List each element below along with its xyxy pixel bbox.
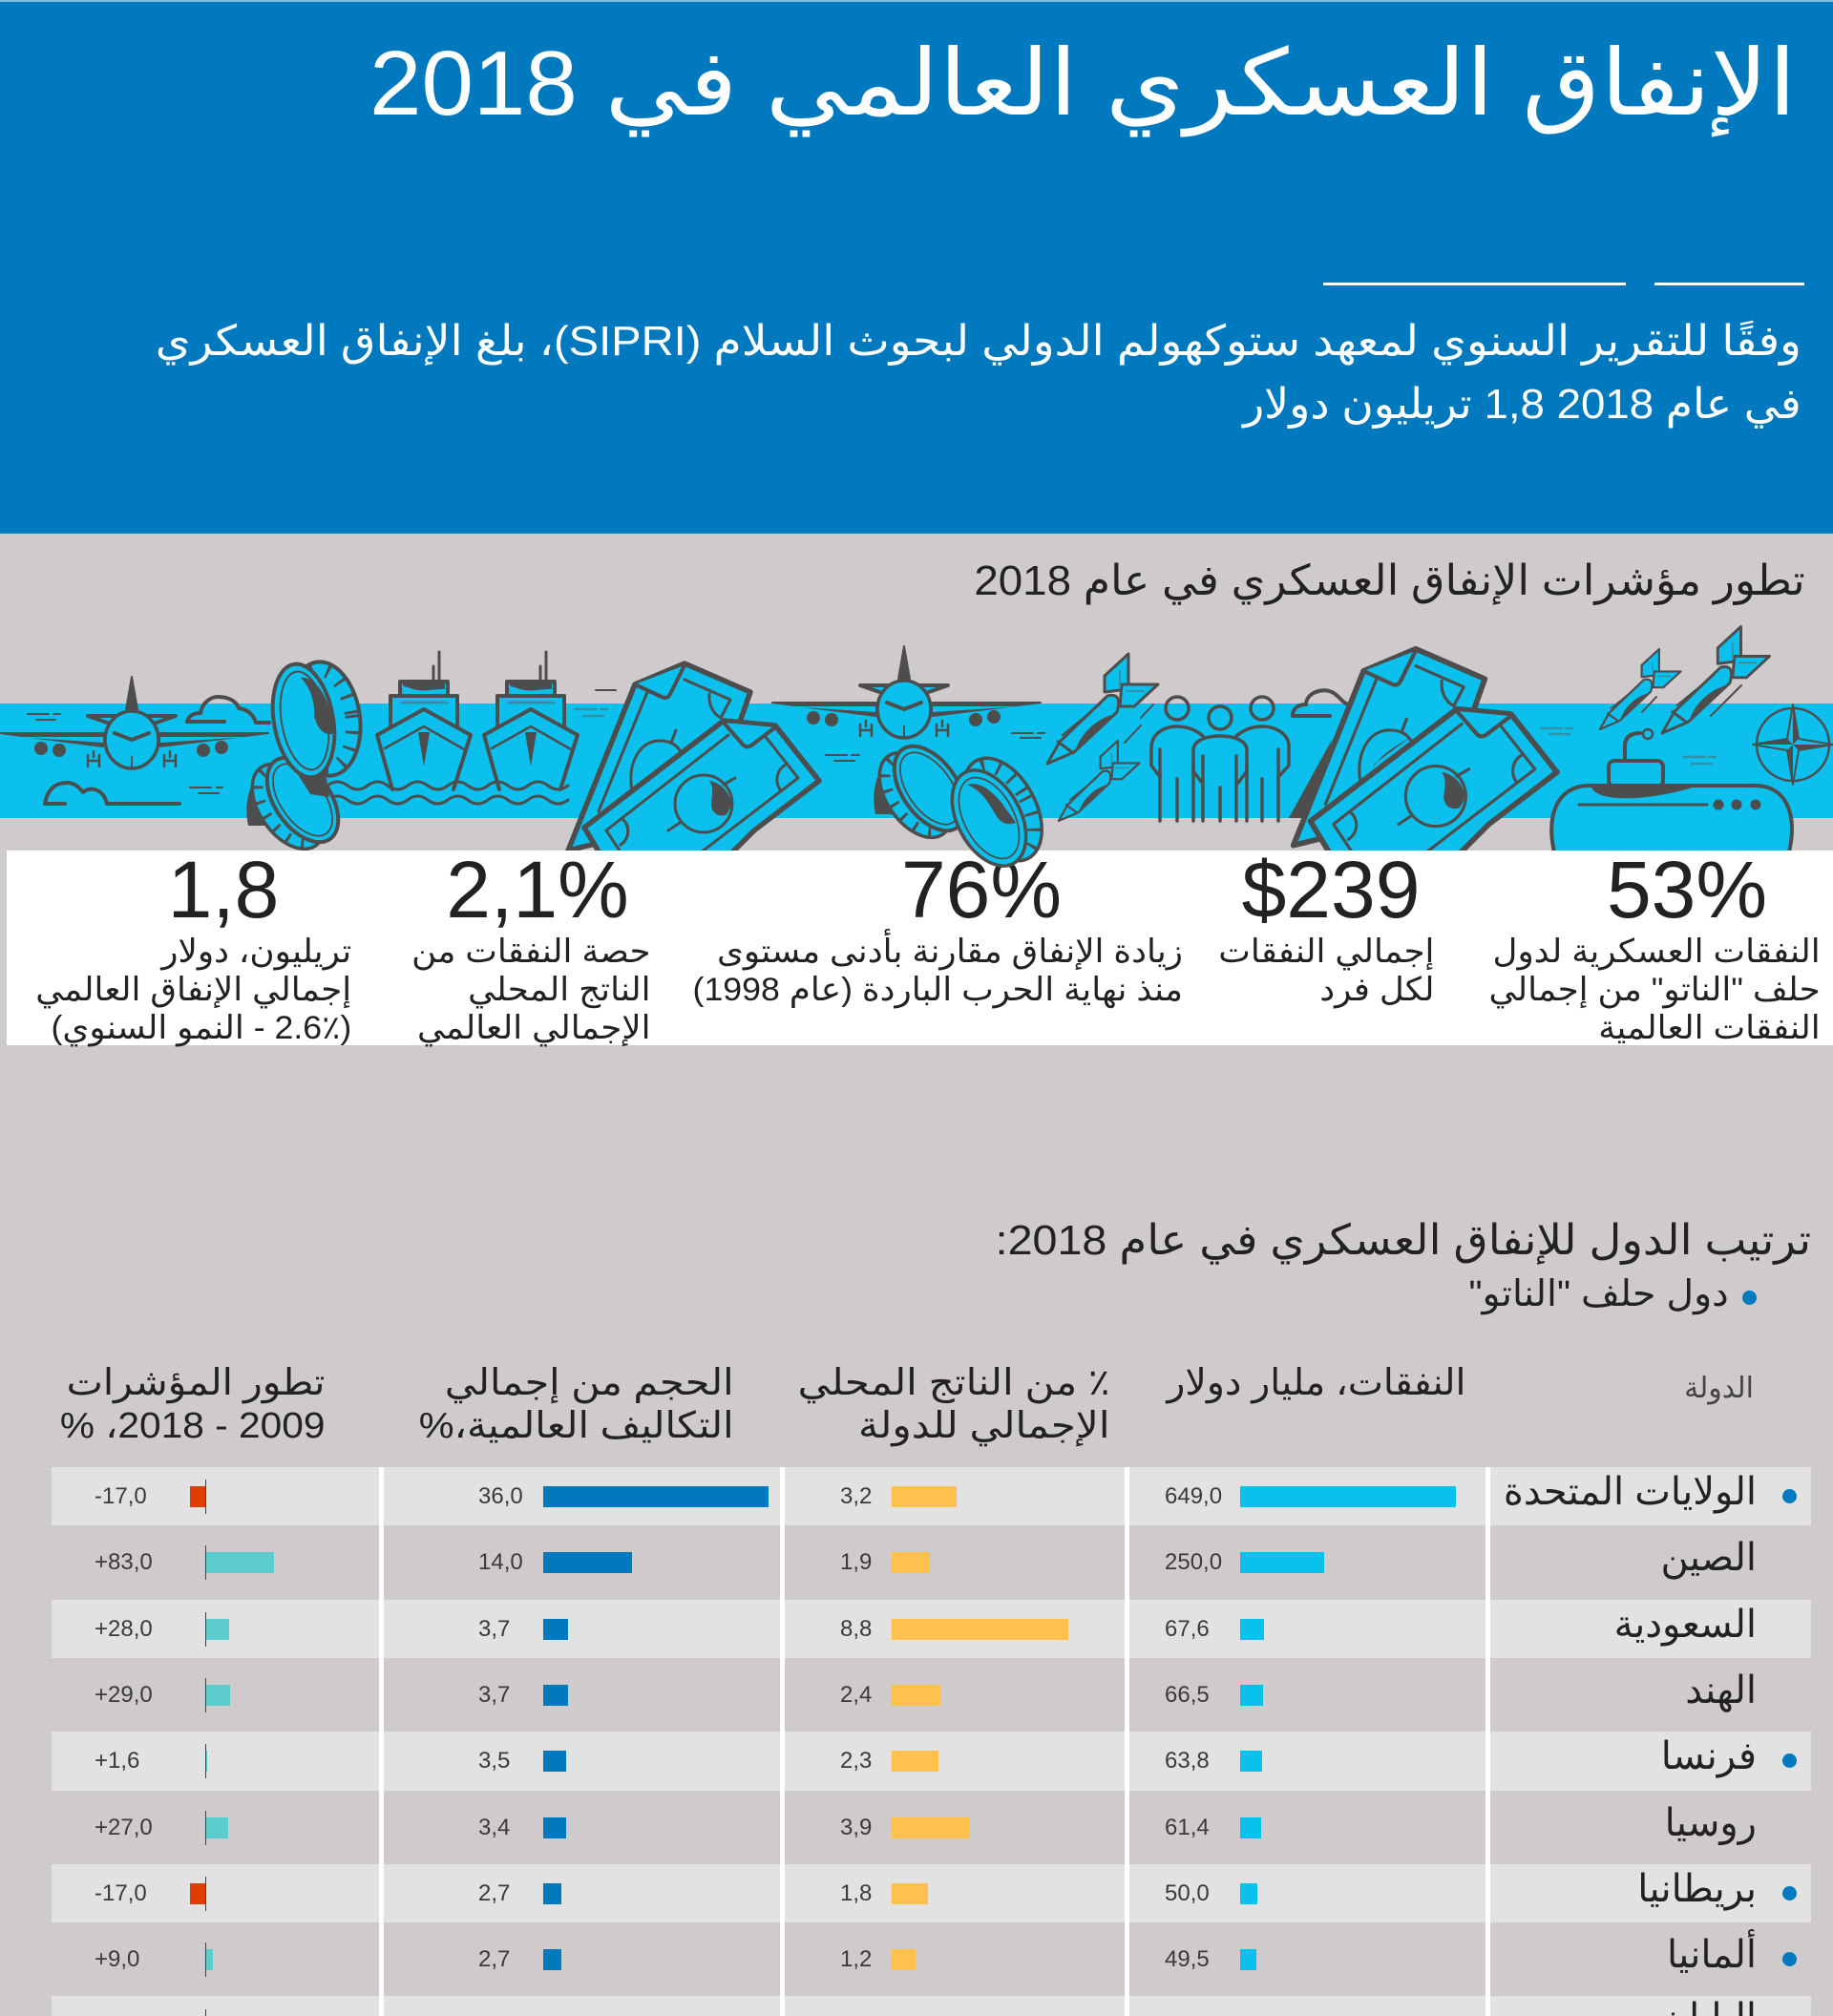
stat: share of world GDP: حصة النفقات من [412, 934, 651, 970]
column header: share of world spending: الحجم من إجمالي [445, 1363, 734, 1403]
row: India: +29,0 [95, 1682, 153, 1707]
stat: increase since 1998 [693, 845, 1183, 1008]
row: China: 250,0 [1165, 1549, 1222, 1575]
stat: spending per person [1218, 845, 1434, 1008]
row: Saudi Arabia [52, 1600, 1811, 1658]
panel: key figures [7, 850, 1833, 1045]
stat: total spending: إجمالي الإنفاق العالمي [35, 972, 351, 1008]
stat: total spending: 1,8 [168, 845, 279, 934]
row: Russia: 61,4 [1165, 1814, 1210, 1840]
stat: NATO share: حلف "الناتو" من إجمالي [1489, 972, 1821, 1008]
stat: total spending: (2.6٪ - النمو السنوي) [51, 1010, 351, 1046]
icon: banknotes right [1289, 645, 1560, 850]
header panel [0, 0, 1833, 534]
icon: airplane centre [772, 646, 1041, 738]
band [0, 704, 1833, 818]
row: China [95, 1537, 1757, 1580]
row: Saudi Arabia: 8,8 [840, 1615, 872, 1642]
icon: missile small centre [1059, 741, 1139, 821]
row: France: 63,8 [1165, 1748, 1210, 1774]
column header: country: الدولة [1684, 1373, 1754, 1404]
row: UK: 50,0 [1165, 1880, 1210, 1905]
row: Russia: 3,9 [840, 1814, 872, 1840]
icon: coin centre right [938, 745, 1058, 878]
icon: clouds and speed lines [28, 690, 1716, 804]
row: UK: 2,7 [478, 1880, 510, 1905]
icon: ship left [377, 652, 471, 789]
column header: percent of GDP: ٪ من الناتج المحلي [798, 1363, 1110, 1403]
row: UK [52, 1864, 1811, 1922]
row: India: الهند [1685, 1669, 1757, 1711]
icon: speed lines centre [1125, 704, 1153, 743]
row: India [95, 1669, 1757, 1712]
row: Germany: 1,2 [840, 1945, 872, 1972]
column header: percent of GDP [798, 1363, 1110, 1447]
column header: share of world spending [419, 1363, 734, 1446]
stat: share of world GDP: الإجمالي العالمي [417, 1010, 651, 1046]
row: Germany: 49,5 [1165, 1945, 1210, 1972]
row: China: +83,0 [95, 1549, 153, 1575]
stat: spending per person: إجمالي النفقات [1218, 934, 1434, 970]
legend dot [1742, 1291, 1757, 1305]
row: Saudi Arabia: +28,0 [95, 1615, 153, 1642]
column header: trend: تطور المؤشرات [66, 1363, 325, 1403]
stat: total spending [35, 845, 351, 1046]
column header: spending: النفقات، مليار دولار [1167, 1363, 1465, 1403]
heading: ranking: ترتيب الدول للإنفاق العسكري في عام 2018: [996, 1217, 1811, 1264]
row: USA: -17,0 [95, 1483, 147, 1508]
row: Germany [95, 1929, 1797, 1977]
row: India: 66,5 [1165, 1682, 1210, 1707]
stat: increase since 1998: 76% [901, 845, 1062, 934]
stat: share of world GDP: الناتج المحلي [469, 972, 651, 1008]
row: Russia [95, 1802, 1757, 1845]
stat: NATO share: النفقات العسكرية لدول [1493, 934, 1821, 970]
row: USA: 36,0 [478, 1483, 523, 1508]
stat: NATO share: النفقات العالمية [1599, 1010, 1821, 1046]
intro text: وفقًا للتقرير السنوي لمعهد ستوكهولم الدولي لبحوث السلام (SIPRI)، بلغ الإنفاق العسكري [156, 318, 1801, 365]
row: Russia: 3,4 [478, 1814, 510, 1840]
row: USA: 649,0 [1165, 1483, 1222, 1508]
icon: ship right [484, 652, 578, 789]
stat: increase since 1998: زيادة الإنفاق مقارنة بأدنى مستوى [717, 934, 1183, 970]
column header: share of world spending: التكاليف العالمية،% [419, 1406, 734, 1446]
illustration strip [0, 624, 1833, 868]
row: UK: -17,0 [95, 1880, 147, 1905]
row: Germany: ألمانيا [1667, 1934, 1757, 1976]
title: 2018 [369, 32, 578, 135]
row: UK: بريطانيا [1637, 1867, 1757, 1909]
row: France [52, 1732, 1811, 1791]
icon: submarine [1551, 729, 1792, 859]
title: الإنفاق العسكري العالمي في [605, 32, 1797, 135]
stat: NATO share: 53% [1607, 845, 1767, 934]
intro text [156, 318, 1801, 429]
stat: increase since 1998: منذ نهاية الحرب الباردة (عام 1998) [693, 972, 1183, 1008]
row: France: 3,5 [478, 1748, 510, 1774]
icon: missile large right [1662, 626, 1770, 733]
row: USA [52, 1467, 1811, 1525]
icon: missile large centre [1047, 654, 1158, 764]
row: China: 1,9 [840, 1549, 872, 1575]
row: Russia: روسيا [1665, 1802, 1757, 1844]
icon: NATO compass [1753, 704, 1833, 785]
row: Germany: 2,7 [478, 1945, 510, 1972]
stat: share of world GDP [412, 845, 651, 1046]
stat: spending per person: $239 [1242, 845, 1420, 934]
row: France: فرنسا [1661, 1735, 1757, 1777]
stat: NATO share [1489, 845, 1821, 1046]
icon: missile small right [1600, 649, 1680, 729]
row: Germany: +9,0 [95, 1945, 139, 1972]
icon: coin upper [264, 657, 368, 797]
row: India: 2,4 [840, 1682, 872, 1707]
stat: share of world GDP: 2,1% [446, 845, 629, 934]
row: France: +1,6 [95, 1748, 139, 1774]
column header: percent of GDP: الإجمالي للدولة [858, 1406, 1110, 1446]
row: France: 2,3 [840, 1748, 872, 1774]
row: Japan [52, 1996, 1811, 2016]
column header: trend: 2009 - 2018، % [59, 1406, 325, 1446]
legend: NATO members [1469, 1274, 1757, 1315]
row: Saudi Arabia: السعودية [1614, 1604, 1757, 1646]
row: China: 14,0 [478, 1549, 523, 1575]
icon: waves [327, 782, 568, 804]
row: Saudi Arabia: 3,7 [478, 1615, 510, 1642]
icon: banknotes left [565, 661, 822, 850]
icon: coin centre left [865, 733, 980, 850]
icon: airplane left [0, 677, 268, 768]
row: India: 3,7 [478, 1682, 510, 1707]
row: USA: 3,2 [840, 1483, 872, 1508]
icon: people [1151, 697, 1289, 821]
row: China: الصين [1660, 1537, 1757, 1579]
divider lines [1323, 283, 1804, 285]
intro text: في عام 2018 1,8 تريليون دولار [1243, 381, 1801, 428]
icon: coin lower [238, 745, 352, 862]
column header: trend [59, 1363, 325, 1446]
stat: total spending: تريليون، دولار [161, 934, 351, 970]
legend label: دول حلف "الناتو" [1469, 1274, 1729, 1314]
row: Saudi Arabia: 67,6 [1165, 1615, 1210, 1642]
heading: indicators: تطور مؤشرات الإنفاق العسكري في عام 2018 [975, 557, 1805, 604]
row: UK: 1,8 [840, 1880, 872, 1905]
stat: spending per person: لكل فرد [1319, 972, 1434, 1008]
row: Russia: +27,0 [95, 1814, 153, 1840]
icon: speed lines right [1642, 685, 1741, 716]
row: USA: الولايات المتحدة [1504, 1470, 1757, 1512]
